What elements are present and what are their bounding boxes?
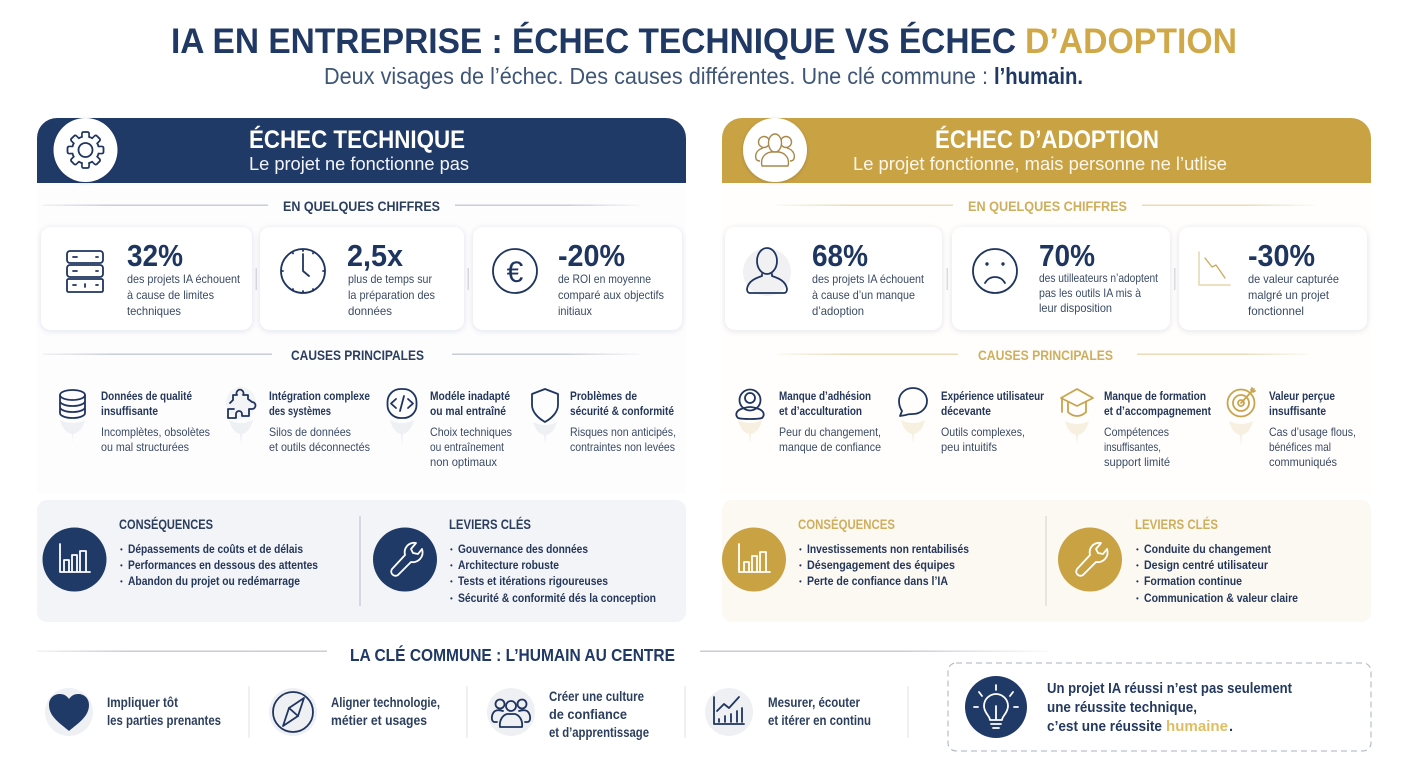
cause: modèle inadapté: Choix techniques [430,425,512,439]
stat card: 32%: des projets IA échouent [127,272,241,286]
header: échec technique: ÉCHEC TECHNIQUE [249,125,465,154]
cause: données de qualité: insuffisante [101,404,158,418]
stat card: 2,5x [260,227,464,330]
cause: manque d'adhésion: Peur du changement, [779,425,881,439]
stat card: 70%: pas les outils IA mis à [1039,286,1141,300]
key: culture de confiance: et d’apprentissage [549,725,649,740]
icon: code [388,389,416,418]
cause: sécurité: contraintes non levées [570,440,675,454]
icon: compass [273,692,313,732]
stat card: -30% [1179,227,1367,330]
stat card: 32% [41,227,252,330]
stat card: 2,5x: plus de temps sur [348,272,432,286]
key: impliquer tôt: les parties prenantes [107,713,221,728]
callout [948,663,1371,751]
panel: conséquences et leviers (technique): Dépassements de coûts et de délais [128,542,303,556]
cause: modèle inadapté: ou mal entraîné [430,404,506,418]
stat card: -30%: fonctionnel [1248,304,1304,318]
panel: conséquences et leviers (adoption): Investissements non rentabilisés [807,542,969,556]
callout: . [1229,719,1233,735]
cause: intégration complexe: Silos de données [269,425,351,439]
panel: conséquences et leviers (adoption): Formation continue [1144,574,1242,588]
stat card: -30%: malgré un projet [1248,288,1330,302]
cause: sécurité: sécurité & conformité [570,404,674,418]
panel: conséquences et leviers (technique): • [450,561,453,570]
icon: speech bubble [899,388,927,416]
cause: données de qualité: Données de qualité [101,389,192,403]
panel: conséquences et leviers (technique): Tests et itérations rigoureuses [458,574,608,588]
cause: valeur perçue: insuffisante [1269,404,1326,418]
stat card: -20% [473,227,682,330]
icon: declining chart [1199,252,1230,285]
cause: manque de formation: Manque de formation [1104,389,1206,403]
title: D’ADOPTION [1025,22,1237,61]
stat card: 2,5x: la préparation des [348,288,435,302]
header: échec technique [37,118,686,183]
cause: valeur perçue: communiqués [1269,455,1337,469]
key: impliquer tôt [45,688,221,736]
panel: conséquences et leviers (technique): • [120,545,123,554]
panel: conséquences et leviers (adoption): • [799,545,802,554]
icon: sad face [973,249,1017,293]
header: échec d'adoption: ÉCHEC D’ADOPTION [935,125,1159,154]
cause: modèle inadapté: ou entraînement [430,440,505,454]
cause: expérience utilisateur: Expérience utilisateur [941,389,1044,403]
key: mesurer, écouter: Mesurer, écouter [768,695,861,710]
panel: conséquences et leviers (adoption): • [799,577,802,586]
stat card: 32%: à cause de limites [127,288,214,302]
icon: euro [493,249,537,293]
cause: expérience utilisateur: peu intuitifs [941,440,997,454]
cause: valeur perçue: bénéfices mal [1269,440,1331,454]
panel: échec d'adoption [722,118,1371,622]
cause: manque de formation: insuffisantes, [1104,440,1161,454]
icon: euro: € [507,256,524,289]
title: IA EN ENTREPRISE : ÉCHEC TECHNIQUE VS ÉCHEC [171,21,1016,61]
stat card: 32%: techniques [127,304,181,318]
cause: expérience utilisateur [899,388,1044,454]
cause: manque de formation: et d’accompagnement [1104,404,1211,418]
panel: conséquences et leviers (technique): Abandon du projet ou redémarrage [128,574,300,588]
panel: conséquences et leviers (adoption): • [1136,577,1139,586]
cause: manque de formation: support limité [1104,455,1170,469]
cause: sécurité: Problèmes de [570,389,637,403]
heading: en quelques chiffres: EN QUELQUES CHIFFRES [283,198,440,214]
icon: user [743,248,791,296]
panel: conséquences et leviers (technique): CONSÉQUENCES [119,517,213,532]
cause: expérience utilisateur: décevante [941,404,991,418]
icon: database [60,390,85,418]
heading: causes principales: CAUSES PRINCIPALES [978,347,1113,363]
key: aligner technologie: Aligner technologie, [331,695,440,710]
panel: conséquences et leviers (adoption): • [799,561,802,570]
key: aligner technologie: métier et usages [331,713,427,728]
heading: causes principales: CAUSES PRINCIPALES [291,347,424,363]
stat card: 68%: d’adoption [812,304,864,318]
subtitle: Deux visages de l’échec. Des causes différentes. Une clé commune : [324,63,988,89]
cause: intégration complexe: des systèmes [269,404,331,418]
panel: conséquences et leviers (technique): Performances en dessous des attentes [128,558,318,572]
icon: shield [532,389,558,422]
icon: wrench [1058,528,1122,592]
stat card: -20%: -20% [558,238,625,273]
icon: bar chart [722,528,786,592]
icon: target [1228,388,1255,416]
cause: intégration complexe [226,387,370,454]
key: culture de confiance: Créer une culture [549,689,644,704]
key: impliquer tôt: Impliquer tôt [107,695,178,710]
subtitle: l’humain. [994,63,1083,89]
panel: conséquences et leviers (adoption): Design centré utilisateur [1144,558,1268,572]
stat card: -20%: initiaux [558,304,592,318]
panel: conséquences et leviers (adoption) [722,500,1371,622]
icon: heart [49,694,89,731]
icon: people [492,700,530,727]
key: mesurer, écouter: et itérer en continu [768,713,871,728]
panel: conséquences et leviers (technique): • [120,577,123,586]
icon: clock [281,249,325,293]
cause: sécurité: Risques non anticipés, [570,425,676,439]
callout: Un projet IA réussi n’est pas seulement [1047,681,1292,697]
stat card: 68%: à cause d’un manque [812,288,915,302]
icon: bar chart [42,528,106,592]
stat card: -30%: de valeur capturée [1248,272,1339,286]
panel: conséquences et leviers (technique): • [120,561,123,570]
key: culture de confiance: de confiance [549,707,627,722]
stat card: -30%: -30% [1248,238,1315,273]
panel: conséquences et leviers (technique): • [450,545,453,554]
cause: modèle inadapté: Modéle inadapté [430,389,510,403]
cause: modèle inadapté: non optimaux [430,455,497,469]
cause: manque d'adhésion [736,389,881,454]
icon: puzzle [228,390,256,418]
panel: conséquences et leviers (technique): Sécurité & conformité dés la conception [458,591,656,605]
panel: conséquences et leviers (adoption): • [1136,545,1139,554]
cause: données de qualité [60,389,210,454]
cause: valeur perçue [1228,388,1356,469]
cause: données de qualité: ou mal structurées [101,440,189,454]
header: échec d'adoption: Le projet fonctionne, mais personne ne l’utlise [853,153,1227,174]
icon: graduation cap [1061,389,1093,416]
stat card: 70%: des utilleateurs n’adoptent [1039,271,1159,285]
header: échec d'adoption [722,118,1371,183]
panel: conséquences et leviers (adoption): Désengagement des équipes [807,558,955,572]
cause: intégration complexe: et outils déconnectés [269,440,370,454]
panel: conséquences et leviers (technique): • [450,577,453,586]
cause: manque d'adhésion: Manque d’adhésion [779,389,871,403]
stat card: 68%: des projets IA échouent [812,272,925,286]
heading: la clé commune: LA CLÉ COMMUNE : L’HUMAIN AU CENTRE [350,644,675,665]
panel: conséquences et leviers (adoption): • [1136,594,1139,603]
cause: expérience utilisateur: Outils complexes, [941,425,1025,439]
key: mesurer, écouter [705,688,871,736]
stat card: 2,5x: données [348,304,392,318]
icon: light bulb [965,676,1027,738]
stat card: 32%: 32% [127,238,183,273]
panel: échec technique [37,118,686,622]
stat card: 70%: 70% [1039,238,1095,273]
cause: sécurité [532,389,676,454]
cause: manque de formation: Compétences [1104,425,1169,439]
cause: manque d'adhésion: et d’acculturation [779,404,862,418]
icon: growth chart [714,697,744,724]
stat card: 68%: 68% [812,238,868,273]
panel: conséquences et leviers (technique): Gouvernance des données [458,542,588,556]
panel: conséquences et leviers (adoption): LEVIERS CLÉS [1135,517,1218,532]
callout: humaine [1166,719,1228,735]
callout: une réussite technique, [1047,700,1197,716]
header: échec technique: Le projet ne fonctionne pas [249,153,469,174]
icon: wrench [373,528,437,592]
stat card: 68% [725,227,942,330]
stat card: 70%: leur disposition [1039,301,1112,315]
panel: conséquences et leviers (adoption): Perte de confiance dans l’IA [807,574,948,588]
key: aligner technologie [269,688,440,736]
key: culture de confiance [487,688,649,740]
cause: valeur perçue: Valeur perçue [1269,389,1335,403]
stat card: -20%: comparé aux objectifs [558,288,664,302]
panel: conséquences et leviers (adoption): CONSÉQUENCES [798,517,895,532]
panel: conséquences et leviers (technique) [37,500,686,622]
stat card: 70% [952,227,1170,330]
icon: server [67,251,103,292]
icon: people [736,390,764,419]
cause: manque d'adhésion: manque de confiance [779,440,881,454]
cause: valeur perçue: Cas d’usage flous, [1269,425,1356,439]
callout: c’est une réussite [1047,719,1162,735]
stat card: -20%: de ROI en moyenne [558,272,651,286]
panel: conséquences et leviers (adoption): • [1136,561,1139,570]
cause: modèle inadapté [388,389,512,469]
heading: en quelques chiffres: EN QUELQUES CHIFFRES [968,198,1127,214]
cause: manque de formation [1061,389,1211,469]
stat card: 2,5x: 2,5x [347,238,404,273]
panel: conséquences et leviers (adoption): Conduite du changement [1144,542,1271,556]
cause: intégration complexe: Intégration complexe [269,389,370,403]
panel: conséquences et leviers (technique): Architecture robuste [458,558,559,572]
panel: conséquences et leviers (technique): • [450,594,453,603]
panel: conséquences et leviers (adoption): Communication & valeur claire [1144,591,1298,605]
cause: données de qualité: Incomplètes, obsolètes [101,425,210,439]
panel: conséquences et leviers (technique): LEVIERS CLÉS [449,517,531,532]
